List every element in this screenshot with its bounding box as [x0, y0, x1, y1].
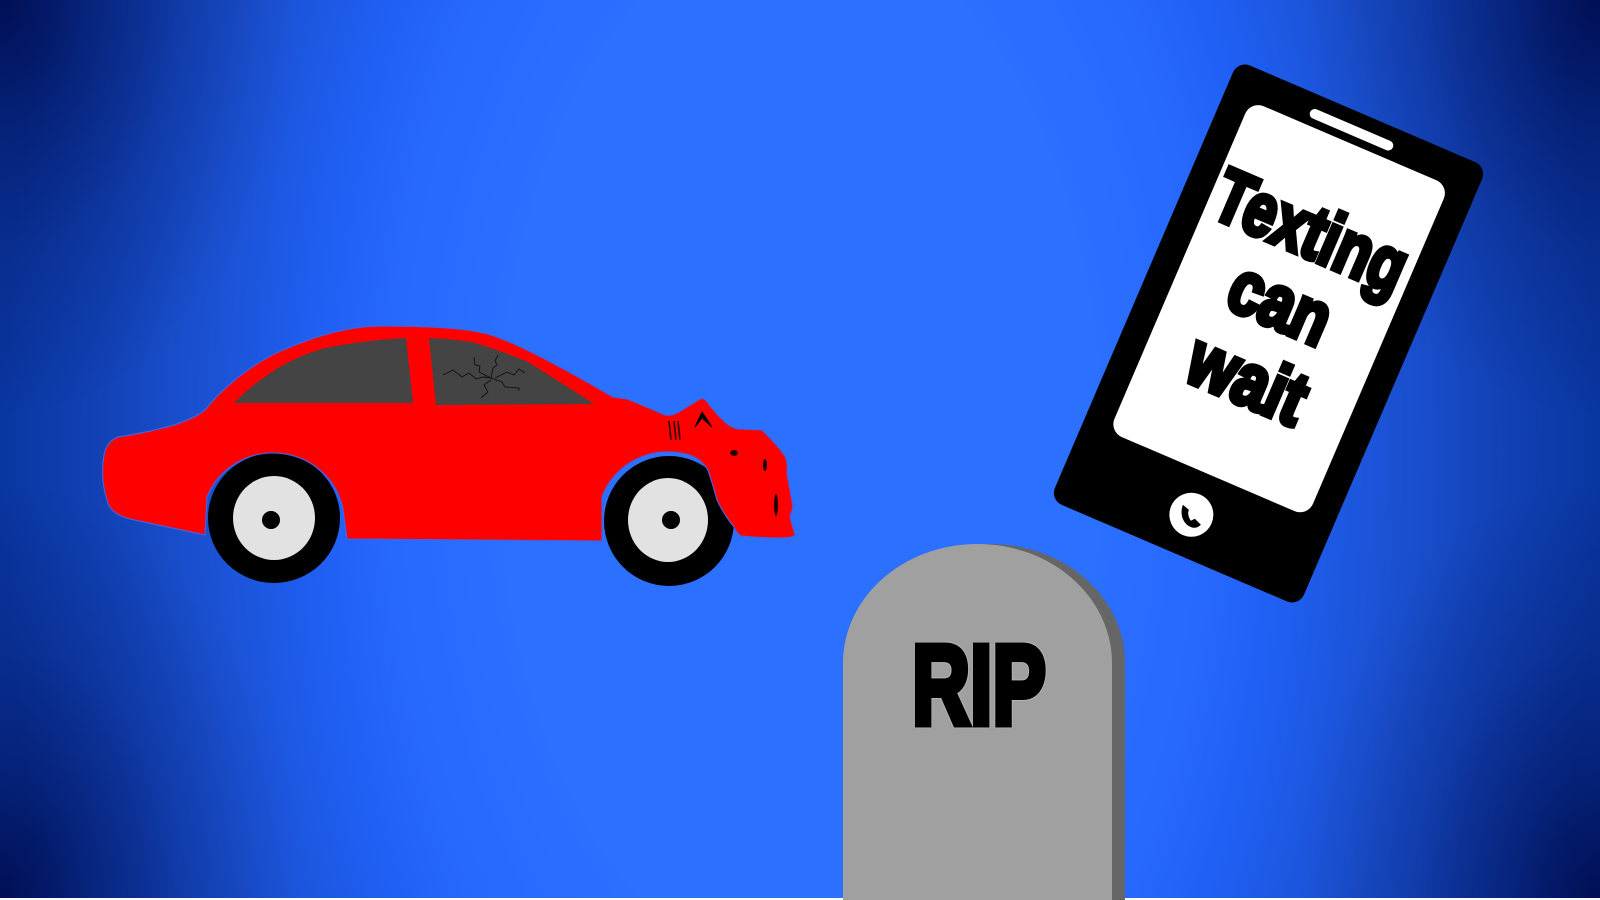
message text — [1138, 153, 1421, 458]
rear window — [234, 338, 413, 403]
tombstone side shadow — [856, 544, 1125, 900]
rear wheel — [208, 453, 340, 583]
phone body — [1050, 60, 1487, 607]
windshield crack — [443, 355, 525, 398]
phone screen — [1109, 101, 1449, 517]
tombstone face — [843, 544, 1112, 900]
front window — [429, 338, 594, 405]
line: Texting: Texting — [1202, 153, 1421, 310]
phone — [1050, 60, 1487, 607]
front wheel — [604, 456, 734, 586]
car body — [103, 326, 795, 541]
line: wait: wait — [1174, 316, 1320, 443]
line: can: can — [1216, 244, 1345, 363]
speaker — [1308, 107, 1395, 152]
dent marks — [669, 412, 778, 516]
RIP text: RIP — [912, 622, 1046, 748]
tombstone — [843, 544, 1125, 900]
home button: phone icon — [1162, 486, 1220, 544]
car — [103, 326, 795, 586]
